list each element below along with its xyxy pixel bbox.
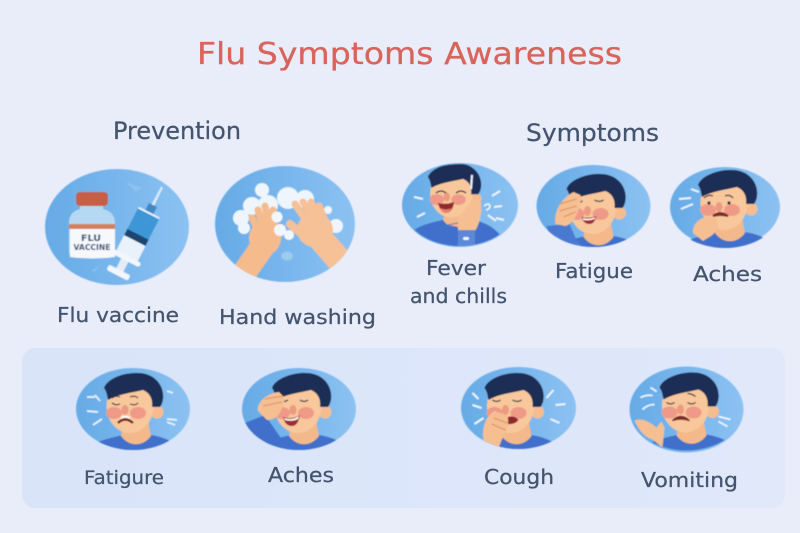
label: aches: Aches <box>693 262 762 286</box>
icon: syringe <box>106 186 164 281</box>
front foam <box>272 212 294 240</box>
title: Flu Symptoms Awareness <box>197 37 622 72</box>
icon: fever and chills <box>402 163 518 250</box>
label: hand washing: Hand washing <box>219 305 376 329</box>
label: fatigue: Fatigue <box>555 259 633 283</box>
icon: vomiting <box>630 366 744 452</box>
label: fatigure (bottom): Fatigure <box>84 467 164 489</box>
icon: fatigue <box>536 165 650 254</box>
icon: aches <box>670 167 780 250</box>
label: fever and chills: and chills <box>410 284 507 308</box>
heading: prevention: Prevention <box>113 117 241 145</box>
arm <box>245 416 288 450</box>
icon: fatigue (bottom) <box>76 368 190 453</box>
arm <box>546 224 580 244</box>
icon: vaccine bottle <box>69 192 115 258</box>
hand <box>483 411 508 448</box>
back foam <box>233 183 343 234</box>
label: aches (bottom): Aches <box>268 463 334 487</box>
icon: aches (bottom) <box>242 368 356 453</box>
icon: hand washing <box>215 166 355 282</box>
label: vomiting: Vomiting <box>641 468 738 492</box>
panel: bottom symptoms <box>22 348 785 508</box>
icon: flu vaccine <box>45 169 189 285</box>
label: fever and chills <box>410 256 507 308</box>
icon: vaccine bottle: FLU <box>81 234 101 244</box>
left hand <box>242 206 282 276</box>
label: cough: Cough <box>484 465 554 489</box>
label: fever and chills: Fever <box>426 256 487 280</box>
hand <box>634 420 664 448</box>
right hand <box>290 202 346 268</box>
hand <box>693 217 718 241</box>
label: flu vaccine: Flu vaccine <box>57 303 179 327</box>
heading: symptoms: Symptoms <box>526 119 659 147</box>
icon: cough <box>461 367 576 453</box>
icon: vaccine bottle: VACCINE <box>74 243 110 252</box>
hand <box>458 199 481 231</box>
